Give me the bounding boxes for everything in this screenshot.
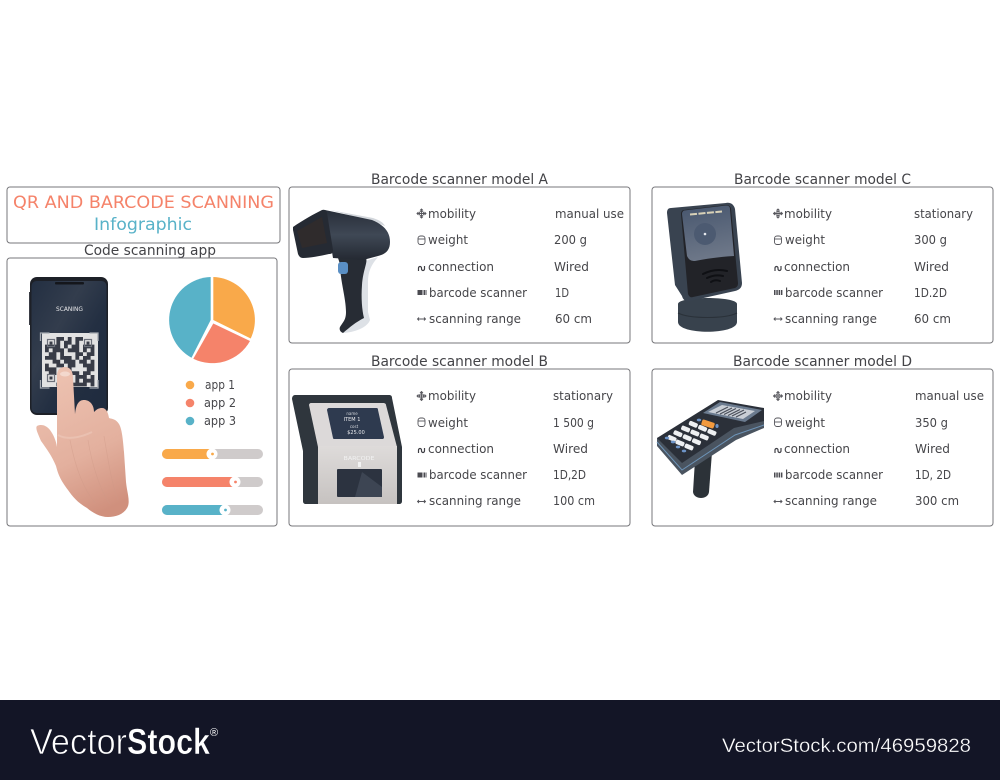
spec labels D [774,388,884,508]
icon: stationary desktop scanner [667,203,742,332]
footer logo: Vector [30,721,127,762]
spec labels C: weight [785,232,825,247]
heading: code scanning app: Code scanning app [84,243,216,259]
spec labels D: weight [785,415,825,430]
footer image id: VectorStock.com/46959828 [722,736,971,757]
icon: stationary kiosk scanner: BARCODE [344,456,375,462]
panel: scanner model B [289,369,630,526]
icon: smartphone with QR code [29,277,108,415]
spec values C: 1D.2D [914,285,947,300]
spec labels B: weight [428,415,468,430]
spec values A [554,206,624,326]
spec values B: Wired [553,441,588,456]
footer bar [0,700,1000,780]
panel: scanner model C [652,187,993,343]
spec values C: 300 g [914,232,947,247]
spec values B: 1 500 g [553,415,594,430]
spec values B: 1D,2D [553,467,586,482]
icon: stationary kiosk scanner: $25.00 [347,430,365,436]
spec labels A [417,206,528,326]
spec values A: 1D [555,285,569,300]
icon: stationary kiosk scanner [292,395,402,504]
spec values C: 60 cm [914,311,951,326]
footer logo: ® [210,727,218,739]
spec labels D: barcode scanner [785,467,884,482]
spec values D: 1D, 2D [915,467,951,482]
spec labels A: connection [428,259,494,274]
spec values D: Wired [915,441,950,456]
spec values D: 300 cm [915,493,959,508]
spec values D [915,388,984,508]
footer logo: Stock [127,721,211,762]
spec values D: manual use [915,388,984,403]
panel: code scanning app [7,258,277,526]
spec values A: Wired [554,259,589,274]
heading: model A: Barcode scanner model A [371,172,548,188]
spec labels A: mobility [428,206,477,221]
spec values B: 100 cm [553,493,595,508]
legend: app 2 [204,395,236,410]
icon: stationary kiosk scanner: name [346,411,358,416]
spec labels C: connection [784,259,850,274]
spec labels D: mobility [784,388,833,403]
icon: stationary kiosk scanner: cost [350,424,359,429]
spec values A: manual use [555,206,624,221]
heading: model B: Barcode scanner model B [371,354,548,370]
legend: app 1 [205,377,235,392]
spec labels B [417,388,528,508]
spec values D: 350 g [915,415,948,430]
legend: app 3 [204,413,236,428]
spec labels D: connection [784,441,850,456]
spec labels A: weight [428,232,468,247]
spec values B: stationary [553,388,614,403]
spec labels B: connection [428,441,494,456]
panel: scanner model A [289,187,630,343]
spec labels B: mobility [428,388,477,403]
panel: scanner model D [652,369,993,526]
legend [186,377,236,428]
spec labels A: barcode scanner [429,285,528,300]
title box [7,187,280,243]
footer logo [30,721,218,762]
spec values A: 200 g [554,232,587,247]
spec values C [914,206,974,326]
spec labels C: mobility [784,206,833,221]
spec values C: Wired [914,259,949,274]
spec values C: stationary [914,206,974,221]
spec labels B: scanning range [429,493,521,508]
icon: smartphone with QR code: SCANING [56,306,83,313]
pie chart [169,277,255,363]
sliders [162,448,263,516]
icon: hand pressing phone [36,367,129,517]
spec values A: 60 cm [555,311,592,326]
icon: handheld terminal scanner [657,400,764,498]
spec labels C [774,206,884,326]
spec values B [553,388,614,508]
icon: handheld scanner [293,210,390,333]
icon: stationary kiosk scanner: ITEM 1 [344,417,360,423]
heading: model D: Barcode scanner model D [733,354,912,370]
heading: model C: Barcode scanner model C [734,172,911,188]
title box: QR AND BARCODE SCANNING [13,193,274,213]
spec labels D: scanning range [785,493,877,508]
spec labels B: barcode scanner [429,467,528,482]
title box: Infographic [94,215,192,235]
spec labels C: scanning range [785,311,877,326]
spec labels A: scanning range [429,311,521,326]
spec labels C: barcode scanner [785,285,884,300]
